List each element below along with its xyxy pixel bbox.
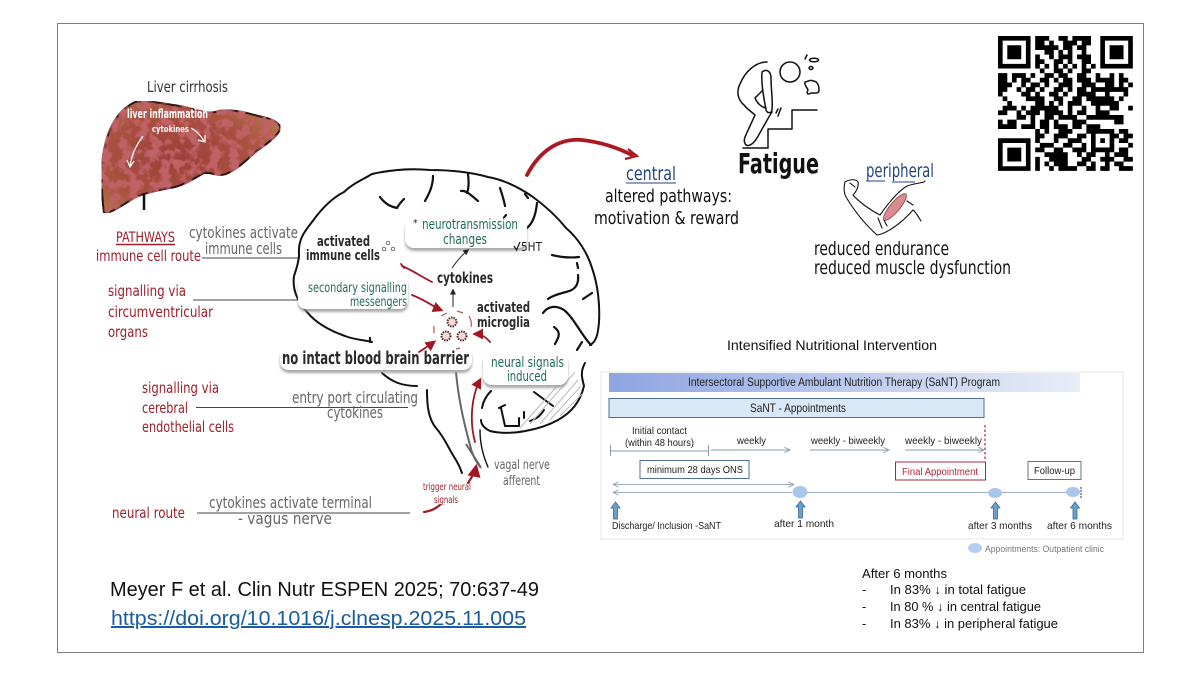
description: reduced endurance: reduced endurance xyxy=(814,238,949,260)
results: after 6 months: - xyxy=(862,617,866,631)
arrow: cytokines to neurotransmission xyxy=(452,250,468,268)
timeline arrows xyxy=(613,484,1066,492)
box: neurotransmission changes xyxy=(405,217,527,248)
results: after 6 months: - xyxy=(862,600,866,614)
cytokines activate immune cells: cytokines activate xyxy=(189,223,298,242)
label: trigger neural signals xyxy=(423,482,471,506)
cerebellum hatching xyxy=(520,372,582,428)
initial contact xyxy=(610,425,708,456)
signalling via circumventricular organs xyxy=(108,282,298,341)
illustration: liver xyxy=(102,101,280,213)
brain outer contour xyxy=(294,169,599,345)
signalling via circumventricular organs: signalling via xyxy=(108,282,186,300)
brain lower contour xyxy=(307,312,462,473)
box: final appointment: Final Appointment xyxy=(902,466,978,478)
arrow: messengers to microglia xyxy=(412,295,441,310)
label: vagal nerve afferent: afferent xyxy=(503,474,540,489)
QR code xyxy=(998,38,1133,169)
neural route: cytokines activate terminal xyxy=(209,493,372,512)
label: trigger neural signals: signals xyxy=(434,495,458,506)
label: activated microglia: activated xyxy=(477,300,530,316)
box: no intact blood brain barrier: no intact blood brain barrier xyxy=(282,348,469,369)
results: after 6 months: After 6 months xyxy=(862,567,947,581)
milestone labels: after 3 months xyxy=(968,520,1032,532)
box: neurotransmission changes: changes xyxy=(443,232,487,248)
box: no intact blood brain barrier xyxy=(280,347,472,370)
label: 5HT with down check mark: 5HT xyxy=(521,240,542,254)
cerebellum folds xyxy=(482,391,553,426)
central underline xyxy=(626,182,676,184)
panel: SaNT program timeline xyxy=(601,372,1123,539)
liver vessel stub xyxy=(143,193,145,210)
results: after 6 months: In 83% ↓ in total fatigue xyxy=(890,583,1026,597)
label: activated immune cells: activated xyxy=(317,234,370,250)
asterisk mark: * xyxy=(413,218,418,229)
label: activated microglia: microglia xyxy=(477,315,530,331)
heading: Fatigue: Fatigue xyxy=(738,147,819,180)
label: activated microglia xyxy=(477,300,530,331)
illustration: brain outline and folds xyxy=(294,169,599,473)
box: final appointment xyxy=(896,462,986,480)
label: peripheral: peripheral xyxy=(866,160,934,182)
label: activated immune cells xyxy=(306,234,395,264)
label: vagal nerve afferent xyxy=(494,458,550,489)
weekly phase: weekly xyxy=(736,435,767,447)
sulci and folds xyxy=(370,174,592,350)
pathways heading: PATHWAYS xyxy=(116,230,175,246)
box: neural signals induced: neural signals xyxy=(491,355,564,371)
final marker line xyxy=(984,425,986,461)
box: minimum 28 days ONS xyxy=(640,460,749,478)
cytokines activate immune cells xyxy=(189,223,300,258)
label: liver inflammation: liver inflammation xyxy=(127,107,208,121)
signalling via cerebral endothelial cells: signalling via xyxy=(142,379,219,397)
barrier dashes xyxy=(434,311,471,349)
milestone labels: after 6 months xyxy=(1047,520,1112,532)
citation: Meyer F et al. Clin Nutr ESPEN 2025; 70:637-49 xyxy=(110,579,539,601)
neural route: - vagus nerve xyxy=(238,509,332,528)
appointments band xyxy=(609,398,984,418)
arrow: neural route tail xyxy=(424,505,440,512)
panel: central fatigue xyxy=(594,163,739,229)
box: follow-up xyxy=(1028,462,1081,480)
neural route: neural route xyxy=(112,504,185,522)
label: central: central xyxy=(626,163,676,185)
description: motivation and reward: motivation & reward xyxy=(594,208,739,229)
arrow: barrier to microglia xyxy=(419,342,434,352)
panel: pathway labels xyxy=(96,223,418,528)
initial contact: (within 48 hours) xyxy=(625,437,694,449)
appointment markers xyxy=(792,486,1080,498)
signalling via cerebral endothelial cells: cerebral xyxy=(142,399,188,417)
milestone labels: after 1 month xyxy=(774,518,834,530)
label: cytokines: cytokines xyxy=(437,269,493,287)
vagal nerve line xyxy=(480,430,488,467)
signalling via cerebral endothelial cells xyxy=(142,379,418,436)
arrows: signalling inside brain xyxy=(401,250,490,512)
cerebellum contour xyxy=(481,363,585,433)
arrow: cytokines to immune cells xyxy=(401,264,432,282)
results: after 6 months xyxy=(862,567,1058,631)
box: neurotransmission changes: neurotransmission xyxy=(422,217,518,233)
box: secondary signalling messengers: messengers xyxy=(350,295,407,310)
label: trigger neural signals: trigger neural xyxy=(423,482,471,493)
signalling via cerebral endothelial cells: endothelial cells xyxy=(142,418,234,436)
header band: Intersectoral Supportive Ambulant Nutrition Therapy (SaNT) Program xyxy=(688,377,1000,389)
panel background xyxy=(601,372,1123,539)
panel: peripheral fatigue xyxy=(814,160,1011,279)
initial contact: Initial contact xyxy=(632,425,687,437)
results: after 6 months: In 83% ↓ in peripheral fatigue xyxy=(890,617,1058,631)
peripheral underlines xyxy=(866,181,915,182)
signalling via circumventricular organs: circumventricular xyxy=(108,303,213,321)
results: after 6 months: In 80 % ↓ in central fatigue xyxy=(890,600,1041,614)
signalling via circumventricular organs: organs xyxy=(108,323,148,341)
cytokines activate immune cells: immune cells xyxy=(205,239,282,258)
appointments band: SaNT - Appointments xyxy=(750,401,846,415)
milestone arrows xyxy=(611,501,1080,519)
icon: arm muscle xyxy=(844,180,925,235)
weekly phase xyxy=(711,435,790,450)
neural route xyxy=(112,493,410,528)
arrowhead: central fatigue xyxy=(625,149,637,159)
weekly biweekly phase two: weekly - biweekly xyxy=(904,435,983,447)
box: follow-up: Follow-up xyxy=(1034,465,1075,477)
arrow: brain to central fatigue xyxy=(527,140,632,175)
legend: appointments: Appointments: Outpatient clinic xyxy=(985,544,1104,554)
label: activated immune cells: immune cells xyxy=(306,248,380,264)
description: reduced muscle dysfunction: reduced muscle dysfunction xyxy=(814,257,1011,279)
box: secondary signalling messengers: secondary signalling xyxy=(308,281,407,296)
heading: liver cirrhosis: Liver cirrhosis xyxy=(147,78,228,96)
icon: fatigued person on stairs xyxy=(738,55,819,148)
box: secondary signalling messengers xyxy=(298,276,408,310)
signalling via cerebral endothelial cells: entry port circulating xyxy=(292,388,418,407)
label: cytokines: cytokines xyxy=(152,125,189,135)
milestone labels xyxy=(612,518,1112,532)
arrow: trigger neural signals xyxy=(468,467,476,483)
weekly biweekly phase one: weekly - biweekly xyxy=(810,435,886,447)
arrow: neural signals to microglia xyxy=(475,334,490,342)
header band xyxy=(609,373,1080,392)
immune cell route: immune cell route xyxy=(96,247,201,265)
pathways underline xyxy=(116,244,175,246)
results: after 6 months: - xyxy=(862,583,866,597)
description: altered pathways: altered pathways: xyxy=(605,186,732,207)
milestone labels: Discharge/ Inclusion -SaNT xyxy=(612,520,721,532)
label: vagal nerve afferent: vagal nerve xyxy=(494,458,550,473)
arrows: cytokine flow in liver xyxy=(127,128,205,167)
arrow: vagus to neural signals xyxy=(472,380,480,442)
box: neural signals induced: induced xyxy=(507,369,547,385)
heading: Intensified Nutritional Intervention: Intensified Nutritional Intervention xyxy=(727,338,937,353)
brainstem nerve xyxy=(456,372,481,468)
icon: activated microglia cells xyxy=(442,318,466,340)
signalling via cerebral endothelial cells: cytokines xyxy=(327,403,383,422)
end tick xyxy=(1080,487,1082,498)
arrow: microglia to cytokines xyxy=(452,290,454,307)
panel: liver cirrhosis xyxy=(102,78,280,213)
box: neural signals induced xyxy=(483,352,568,385)
box: minimum 28 days ONS: minimum 28 days ONS xyxy=(647,464,743,476)
DOI link text: https://doi.org/10.1016/j.clnesp.2025.11.005 xyxy=(111,608,526,630)
